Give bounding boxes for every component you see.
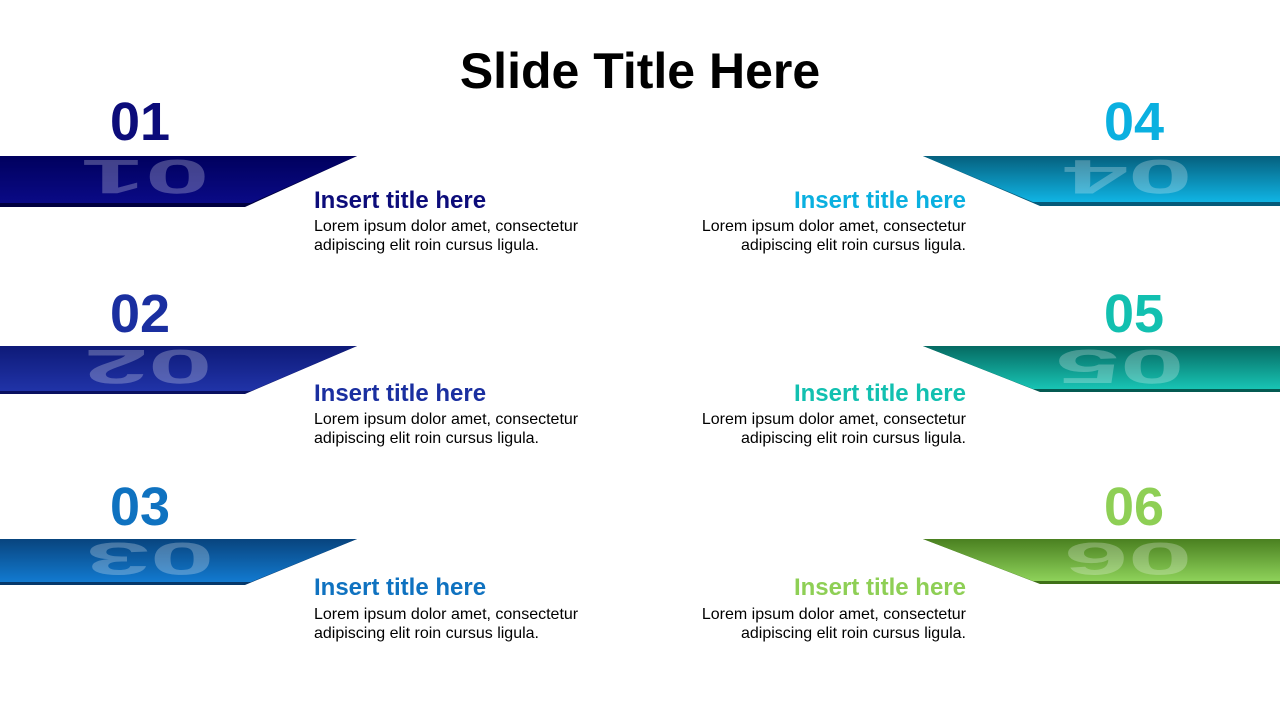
number 06: 06 (1104, 477, 1164, 537)
text 02 (314, 380, 579, 447)
text 06: Insert title here (794, 574, 966, 601)
text 05: Insert title here (794, 380, 966, 407)
item 05 (702, 284, 1280, 447)
band 04: 04 (1064, 150, 1192, 204)
text 04: adipiscing elit roin cursus ligula. (741, 237, 966, 254)
band 06 (923, 533, 1280, 584)
text 02: adipiscing elit roin cursus ligula. (314, 430, 539, 447)
text 06: Lorem ipsum dolor amet, consectetur (702, 606, 967, 623)
item 06 (702, 477, 1280, 642)
text 05 (702, 380, 967, 447)
number 02: 02 (110, 284, 170, 344)
number 01: 01 (110, 92, 170, 152)
item 01 (0, 92, 579, 254)
band 01 (0, 150, 357, 207)
title: Slide Title Here (460, 43, 820, 99)
text 03: Insert title here (314, 574, 486, 601)
item 03 (0, 477, 579, 642)
text 03: Lorem ipsum dolor amet, consectetur (314, 606, 579, 623)
band 02 (0, 340, 357, 394)
text 04 (702, 187, 967, 254)
item 04 (702, 92, 1280, 254)
text 04: Lorem ipsum dolor amet, consectetur (702, 218, 967, 235)
text 06 (702, 574, 967, 642)
text 01: Lorem ipsum dolor amet, consectetur (314, 218, 579, 235)
band 05 (923, 340, 1280, 394)
text 06: adipiscing elit roin cursus ligula. (741, 625, 966, 642)
text 03 (314, 574, 579, 642)
text 05: adipiscing elit roin cursus ligula. (741, 430, 966, 447)
number 03: 03 (110, 477, 170, 537)
item 02 (0, 284, 579, 447)
text 01: adipiscing elit roin cursus ligula. (314, 237, 539, 254)
text 01: Insert title here (314, 187, 486, 214)
band 06: 06 (1064, 533, 1192, 584)
text 02: Insert title here (314, 380, 486, 407)
band 01: 01 (81, 150, 209, 204)
text 01 (314, 187, 579, 254)
band 05: 05 (1056, 340, 1184, 394)
number 05: 05 (1104, 284, 1164, 344)
text 02: Lorem ipsum dolor amet, consectetur (314, 411, 579, 428)
number 04: 04 (1104, 92, 1164, 152)
text 03: adipiscing elit roin cursus ligula. (314, 625, 539, 642)
band 03 (0, 533, 357, 585)
text 05: Lorem ipsum dolor amet, consectetur (702, 411, 967, 428)
band 02: 02 (84, 340, 212, 394)
band 04 (923, 150, 1280, 206)
text 04: Insert title here (794, 187, 966, 214)
band 03: 03 (86, 533, 214, 584)
